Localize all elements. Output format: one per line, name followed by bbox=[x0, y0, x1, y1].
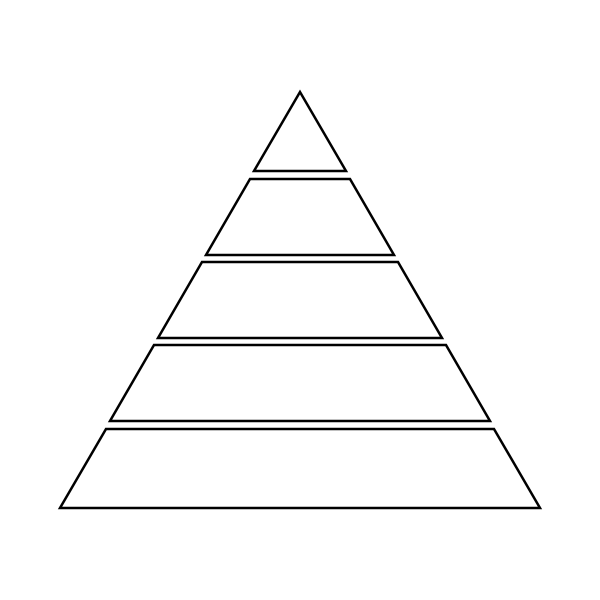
pyramid tier 2 bbox=[206, 179, 394, 255]
pyramid tier 5: base bbox=[60, 429, 540, 508]
pyramid tier 1: apex bbox=[254, 92, 346, 171]
pyramid tier 4 bbox=[110, 345, 490, 421]
pyramid tier 3 bbox=[158, 262, 442, 338]
